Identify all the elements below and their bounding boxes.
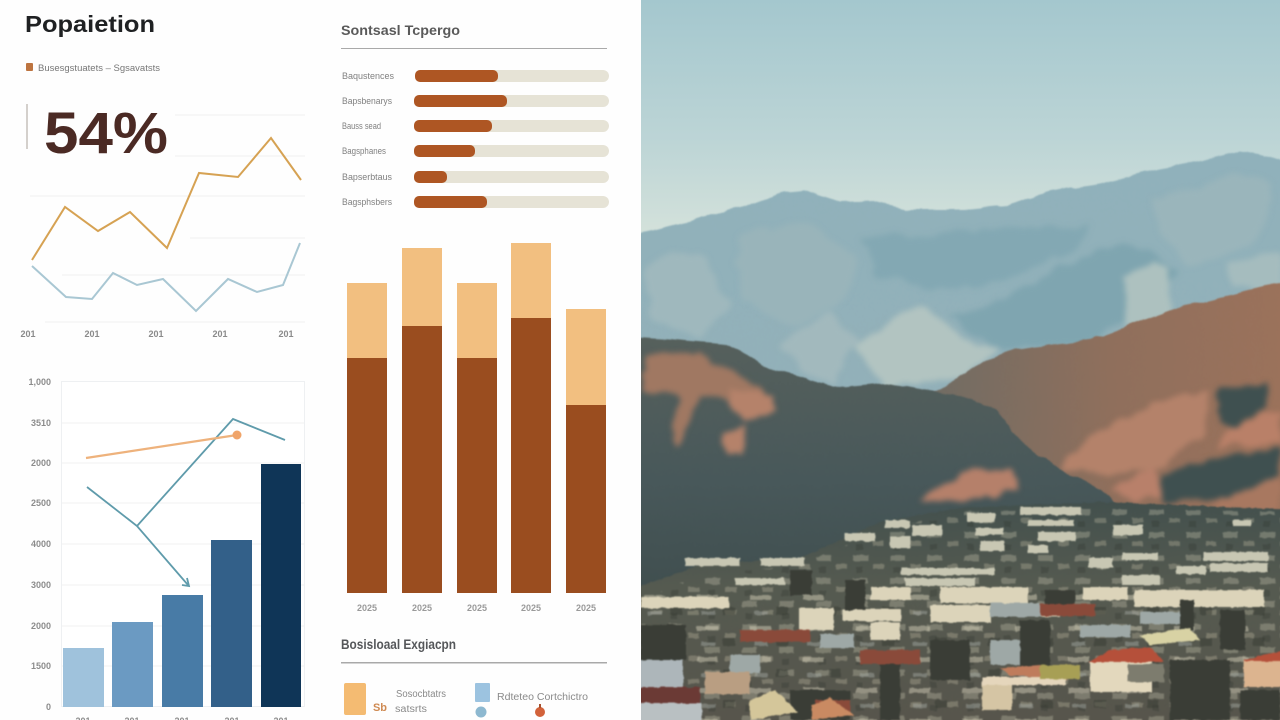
legend: regional	[344, 683, 588, 718]
line chart: population trend	[20, 115, 305, 339]
orange swatch	[344, 683, 366, 715]
town base	[630, 502, 1280, 720]
foreground house with red roof	[1089, 647, 1164, 692]
year labels: 2025	[576, 603, 596, 613]
left dark hill	[641, 336, 1116, 588]
heading: regional: Bosisloaal Exgiacpn	[341, 636, 456, 652]
orange line series	[32, 138, 301, 260]
y axis labels: 3000	[31, 580, 51, 590]
building texture	[641, 508, 1280, 720]
bar labels	[75, 716, 289, 720]
orange trend line	[86, 430, 242, 458]
right foothill	[933, 282, 1280, 510]
legend: regional: Sosocbtatrs	[396, 689, 446, 700]
bar and line chart: blue	[28, 377, 304, 720]
y axis labels: 2000	[31, 458, 51, 468]
y axis labels: 3510	[31, 418, 51, 428]
x axis labels: 201	[278, 329, 294, 339]
legend: regional: Sb	[373, 702, 387, 714]
panel: data charts	[0, 0, 641, 720]
far mountain range	[641, 151, 1280, 392]
middle rows of houses	[641, 587, 1264, 640]
arrow line down	[87, 487, 189, 586]
bar labels: Bauss sead	[342, 121, 381, 131]
horizontal progress bars	[342, 70, 609, 208]
y axis labels: 1500	[31, 661, 51, 671]
bar labels: Bagsphsbers	[342, 197, 392, 207]
lower building texture	[641, 590, 1280, 720]
icon: small fruit	[535, 704, 545, 717]
legend: regional: Rdteteo Cortchictro	[497, 692, 588, 703]
bar labels: Bagsphanes	[342, 146, 386, 156]
year labels: 2025	[467, 603, 487, 613]
red roofs	[740, 604, 1095, 712]
y axis labels	[28, 377, 51, 712]
sky	[641, 0, 1280, 234]
legend: regional: satsrts	[395, 704, 427, 715]
y axis labels: 1,000	[28, 377, 51, 387]
town	[630, 502, 1280, 720]
x axis labels: 201	[148, 329, 164, 339]
bar labels: Baqustences	[342, 71, 394, 81]
stacked bar chart	[347, 243, 606, 613]
heading: sectoral: Sontsasl Tcpergo	[341, 22, 460, 38]
dark trees	[641, 570, 1280, 720]
big number: 54%: 54%	[44, 101, 168, 166]
x axis labels: 201	[84, 329, 100, 339]
x axis labels	[20, 329, 294, 339]
lower left buildings	[636, 660, 855, 720]
bluish buildings	[730, 603, 1180, 673]
y axis labels: 2500	[31, 498, 51, 508]
right house	[1244, 650, 1280, 687]
bar labels	[342, 71, 394, 207]
year labels: 2025	[412, 603, 432, 613]
y axis labels: 0	[46, 702, 51, 712]
year labels: 2025	[357, 603, 377, 613]
y axis labels: 2000	[31, 621, 51, 631]
blue line series	[32, 243, 300, 311]
title: Popaietion	[25, 11, 155, 37]
bar labels: Bapsbenarys	[342, 96, 392, 106]
bar labels: Bapserbtaus	[342, 172, 392, 182]
x axis labels: 201	[212, 329, 228, 339]
year labels: 2025	[521, 603, 541, 613]
blue swatch	[475, 683, 490, 702]
blue bars	[63, 464, 301, 707]
photo: mountains and town	[620, 0, 1280, 720]
year labels	[357, 603, 596, 613]
x axis labels: 201	[20, 329, 36, 339]
rising teal line	[137, 419, 285, 526]
house lower centre	[982, 665, 1080, 710]
yellow-lit roof	[1140, 628, 1200, 645]
legend: population summary: Busesgstuatets – Sgsavatsts	[38, 63, 161, 73]
y axis labels: 4000	[31, 539, 51, 549]
upper houses	[685, 507, 1268, 586]
